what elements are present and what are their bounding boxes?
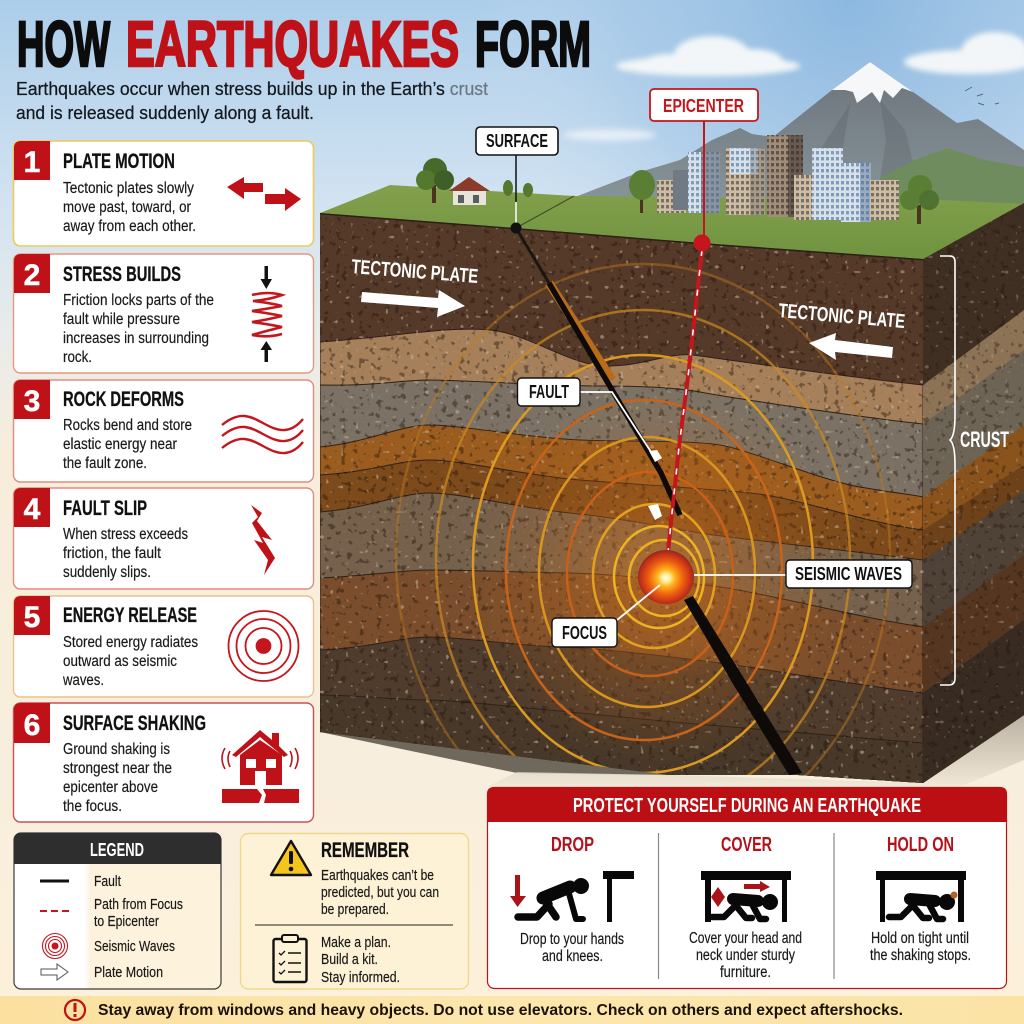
panel: step 1 plate motion: 1 (24, 146, 40, 179)
panel: step 4 fault slip: friction, the fault (63, 545, 162, 562)
panel: step 2 stress builds: increases in surrounding (63, 330, 209, 347)
tectonic plate label right: TECTONIC PLATE (778, 300, 906, 333)
legend: plate motion: Plate Motion (94, 965, 163, 981)
icon: alert circle (65, 1000, 85, 1020)
clouds (564, 32, 1024, 141)
icon: cover figure (701, 871, 791, 922)
tectonic plate label right (778, 300, 906, 360)
panel: step 2 stress builds: Friction locks parts of the (63, 292, 214, 309)
epicenter label: EPICENTER (663, 96, 744, 116)
path from focus to epicenter (668, 121, 704, 553)
ground surface (320, 185, 1024, 259)
icon: opposing arrows (227, 177, 301, 211)
column: cover: Cover your head and (689, 930, 802, 947)
safety footer banner: Stay away from windows and heavy objects. Do not use elevators. Check on others and expect aftershocks. (98, 1002, 903, 1019)
panel: step 5 energy release: outward as seismic (63, 653, 177, 670)
epicenter label (650, 89, 758, 121)
column: cover: neck under sturdy (696, 947, 795, 964)
tectonic plate label left (351, 256, 479, 317)
panel: step 1 plate motion: Tectonic plates slowly (63, 180, 194, 197)
panel: step 1 plate motion: PLATE MOTION (63, 150, 175, 173)
panel: step 2 stress builds (14, 254, 314, 373)
panel: step 2 stress builds: 2 (24, 259, 40, 292)
panel: step 6 surface shaking: 6 (24, 709, 40, 742)
panel: step 6 surface shaking (14, 703, 314, 822)
panel: step 6 surface shaking: strongest near the (63, 760, 172, 777)
icon: drop figure (510, 871, 634, 922)
legend: path: to Epicenter (94, 914, 159, 930)
legend: seismic waves (42, 934, 175, 958)
protect header (487, 787, 1007, 822)
seismic waves label (694, 560, 912, 588)
panel: step 3 rock deforms: Rocks bend and store (63, 417, 192, 434)
fault label (518, 378, 662, 520)
legend: plate motion (41, 964, 163, 981)
panel: step 2 stress builds: STRESS BUILDS (63, 263, 181, 286)
panel: step 3 rock deforms: elastic energy near (63, 436, 177, 453)
column: drop (510, 834, 634, 965)
seismic wave rings (394, 262, 892, 776)
mountain (575, 62, 1024, 210)
panel: step 2 stress builds: rock. (63, 349, 92, 366)
panel: step 4 fault slip: When stress exceeds (63, 526, 188, 543)
panel: step 6 surface shaking: Ground shaking is (63, 741, 170, 758)
panel: remember: predicted, but you can (321, 885, 439, 901)
column: cover: COVER (721, 834, 772, 856)
panel: step 1 plate motion: away from each other. (63, 218, 196, 235)
icon: lightning crack (251, 505, 275, 575)
panel: step 5 energy release: ENERGY RELEASE (63, 604, 197, 627)
panel: step 5 energy release: 5 (24, 601, 40, 634)
trees and house (416, 158, 939, 224)
icon: shaking house (222, 730, 299, 803)
icon: hold figure (876, 871, 966, 922)
birds (965, 87, 999, 105)
panel: step 5 energy release: waves. (62, 672, 104, 689)
epicenter dot (694, 234, 710, 252)
tectonic plate label left: TECTONIC PLATE (351, 256, 479, 288)
column: cover (689, 834, 802, 981)
panel: step 6 surface shaking: epicenter above (63, 779, 158, 796)
panel: step 4 fault slip: suddenly slips. (63, 564, 151, 581)
surface label (476, 127, 558, 234)
panel: step 5 energy release: Stored energy radiates (63, 634, 198, 651)
focus label: FOCUS (562, 623, 607, 643)
panel: step 6 surface shaking: SURFACE SHAKING (63, 712, 206, 735)
panel: legend: LEGEND (90, 840, 144, 860)
subtitle: and is released suddenly along a fault. (16, 103, 314, 123)
panel: remember: Stay informed. (321, 970, 400, 986)
icon: concentric rings (228, 611, 298, 681)
shadow under block (320, 715, 1024, 787)
icon: warning triangle (271, 841, 311, 875)
title: EARTHQUAKES (126, 8, 459, 80)
column: hold on (870, 834, 971, 964)
title: FORM (475, 8, 591, 80)
surface label: SURFACE (486, 131, 548, 151)
legend: fault (40, 874, 121, 890)
panel: remember: Make a plan. (321, 935, 391, 951)
column: hold on: the shaking stops. (870, 947, 971, 964)
panel: legend (14, 833, 221, 989)
legend: fault: Fault (94, 874, 121, 890)
fault line (516, 228, 802, 775)
subtitle (16, 79, 488, 123)
crust bracket and label (940, 256, 1009, 685)
fault label: FAULT (529, 382, 569, 402)
column: drop: and knees. (542, 948, 603, 965)
panel: protect yourself (487, 787, 1007, 988)
column: hold on: HOLD ON (887, 834, 954, 856)
panel: remember: Build a kit. (321, 952, 378, 968)
icon: bending waves (222, 416, 303, 453)
panel: step 5 energy release (14, 596, 314, 697)
column: drop: Drop to your hands (520, 931, 624, 948)
panel: step 3 rock deforms: the fault zone. (63, 455, 147, 472)
legend: seismic waves: Seismic Waves (94, 939, 175, 955)
cross-section front face (320, 213, 923, 783)
legend: path: Path from Focus (94, 897, 183, 913)
subtitle: Earthquakes occur when stress builds up in the Earth’s crust (16, 79, 488, 99)
panel: remember (240, 834, 468, 989)
glow around focus (490, 410, 830, 744)
panel: step 1 plate motion: move past, toward, or (63, 199, 191, 216)
title: HOW (17, 8, 110, 80)
focus label (552, 585, 660, 647)
panel: remember: be prepared. (321, 902, 389, 918)
rock layers (320, 329, 923, 790)
panel: remember: Earthquakes can’t be (321, 868, 434, 884)
cross-section right face (923, 190, 1024, 800)
panel: step 1 plate motion (14, 141, 314, 246)
panel: step 4 fault slip: FAULT SLIP (63, 497, 147, 520)
legend header (14, 833, 221, 864)
column: cover: furniture. (720, 964, 771, 981)
panel: step 3 rock deforms: 3 (24, 385, 40, 418)
focus point (638, 550, 694, 604)
seismic waves label: SEISMIC WAVES (795, 564, 902, 584)
panel: step 4 fault slip (14, 488, 314, 589)
panel: step 2 stress builds: fault while pressure (63, 311, 180, 328)
safety footer banner (0, 996, 1024, 1024)
panel: step 6 surface shaking: the focus. (63, 798, 122, 815)
city buildings (657, 135, 899, 222)
column: drop: DROP (551, 834, 594, 856)
panel: step 3 rock deforms: ROCK DEFORMS (63, 388, 184, 411)
icon: clipboard (274, 935, 306, 982)
dark turf edge (320, 213, 923, 259)
panel: step 3 rock deforms (14, 380, 314, 482)
legend: path (40, 897, 183, 930)
icon: compressed spring (252, 266, 282, 362)
column: hold on: Hold on tight until (871, 930, 969, 947)
panel: step 4 fault slip: 4 (24, 493, 41, 526)
panel: remember: REMEMBER (321, 839, 409, 862)
